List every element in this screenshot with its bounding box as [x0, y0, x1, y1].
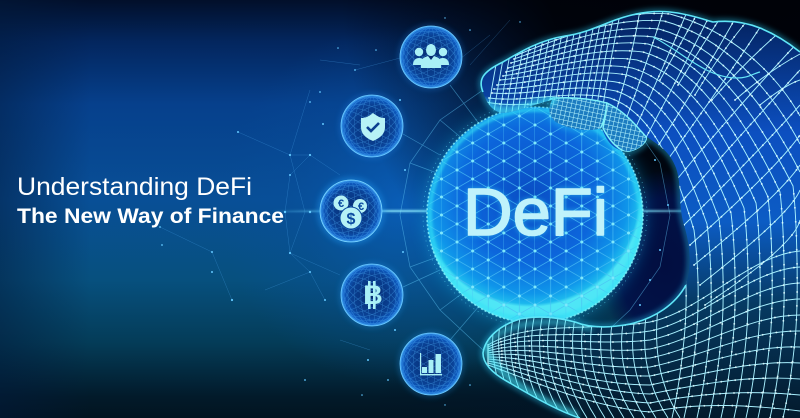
icon: coins: $ — [347, 211, 356, 228]
title: Understanding DeFi: Understanding DeFi — [17, 173, 252, 201]
hand mesh lines — [486, 5, 800, 418]
globe lattice — [428, 108, 642, 322]
subtitle: The New Way of Finance: The New Way of Finance — [17, 205, 284, 228]
sphere: chart icon — [391, 325, 471, 403]
sphere: people icon — [391, 18, 471, 96]
globe halo — [425, 105, 645, 325]
finger pads — [545, 98, 647, 152]
sphere: bitcoin icon — [332, 256, 412, 334]
knuckle crease — [653, 37, 760, 78]
horizontal light flare — [270, 210, 760, 212]
hand body — [470, 0, 800, 418]
globe body — [427, 107, 643, 323]
hand mesh nodes — [486, 5, 800, 418]
sphere: currency icon — [311, 172, 391, 250]
globe — [423, 103, 647, 327]
icon: coins — [334, 196, 367, 230]
hand glow outline — [481, 11, 800, 418]
icon: coins: € — [338, 198, 344, 210]
network cage around globe — [383, 80, 670, 350]
title text — [17, 173, 284, 228]
wireframe hand — [470, 0, 800, 418]
globe label: DeFi: DeFi — [463, 175, 608, 250]
globe label: DeFi: DeFi — [463, 175, 608, 250]
background network lines and particles — [159, 17, 669, 406]
icon: bar chart — [420, 353, 442, 375]
fingertip glow — [486, 100, 590, 415]
icon: people — [413, 44, 449, 68]
hand edge — [481, 11, 800, 418]
globe rim — [423, 103, 647, 327]
icon: coins: € — [358, 201, 364, 213]
icon: bitcoin: B — [363, 280, 383, 310]
icon: shield with check — [361, 113, 385, 141]
sphere: shield icon — [332, 87, 412, 165]
